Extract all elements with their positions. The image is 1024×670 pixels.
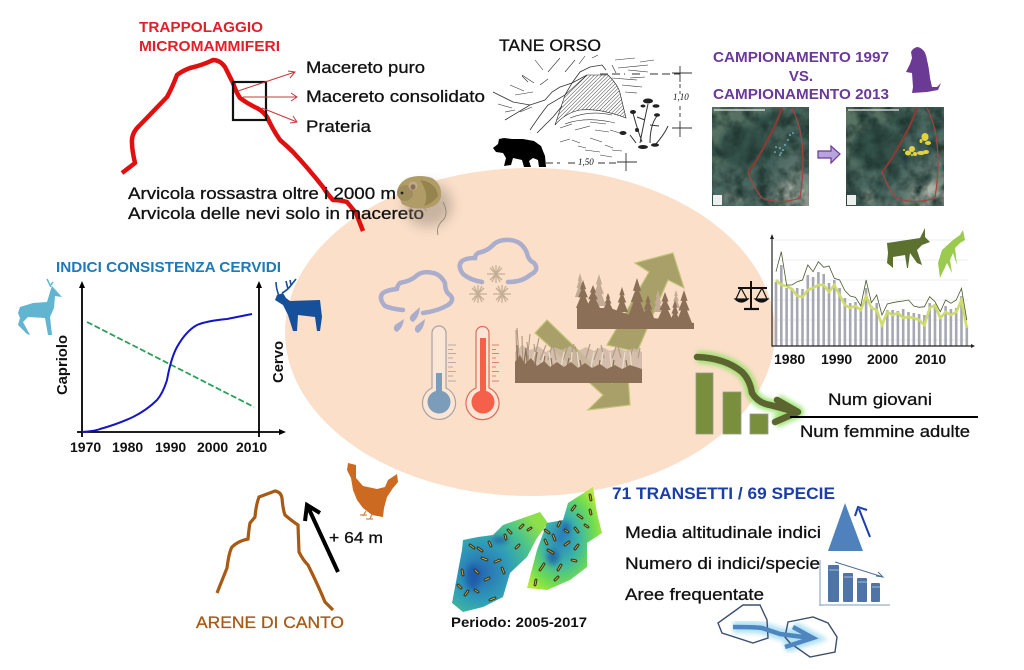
icon: area shift polygons (718, 605, 837, 657)
grouse legs (360, 511, 373, 519)
sampling square (233, 82, 266, 120)
panel: song arenas (196, 463, 398, 632)
axis years (70, 439, 267, 455)
icon: warm thermometer (466, 326, 499, 420)
heading: sampling comparison (713, 49, 889, 103)
heading: sampling comparison: VS. (789, 68, 813, 85)
transect squiggles (458, 495, 591, 600)
DEM dark valleys (466, 522, 570, 590)
mountain outline (217, 491, 333, 610)
icon: roe deer (18, 279, 62, 335)
axis years: 1970 (70, 439, 101, 455)
den dimensions: 1,50 (578, 157, 594, 167)
den dimensions (578, 92, 689, 167)
map 1997 (712, 107, 809, 206)
metric labels: Media altitudinale indici (625, 523, 821, 542)
fraction: Num giovani (828, 390, 932, 409)
panel: marmot sampling (712, 47, 944, 206)
axis years: 2000 (867, 351, 898, 367)
icon: bear (493, 138, 546, 167)
icon: red deer (275, 279, 322, 331)
icon: snow cloud (460, 240, 536, 303)
axis years: 2010 (236, 439, 267, 455)
panel: chamois chart (735, 228, 975, 367)
habitat labels (306, 58, 485, 136)
axis years: 1980 (774, 351, 805, 367)
icon: marmot (906, 47, 941, 93)
icon: rain cloud (381, 272, 452, 333)
map 2013 (846, 107, 944, 206)
chart axes (77, 281, 286, 437)
arrows to habitats (238, 71, 297, 123)
heading: trapping: TRAPPOLAGGIO (139, 19, 263, 36)
grid lines (773, 240, 968, 340)
chart axes (770, 234, 975, 348)
red mountain profile (122, 60, 363, 231)
bars (776, 265, 967, 346)
arrow: grassland down (535, 320, 630, 410)
light green series (776, 280, 967, 328)
icon: balance scale (735, 281, 768, 309)
icon: declining bars (820, 560, 890, 606)
heading: sampling comparison: CAMPIONAMENTO 1997 (713, 49, 889, 66)
den dimensions: 1,10 (673, 92, 689, 102)
panel: bear dens (493, 36, 692, 171)
icon: vole (397, 176, 452, 235)
red deer curve (82, 314, 252, 432)
arrow: forest up (607, 253, 684, 352)
den sketch (493, 55, 692, 171)
icon: grouse (347, 463, 398, 517)
icon: cold thermometer (422, 326, 456, 419)
habitat labels: Macereto consolidato (306, 87, 485, 106)
icon: forest (575, 273, 694, 329)
roe deer dashed trend (87, 322, 254, 407)
habitat labels: Prateria (306, 117, 372, 136)
vole species text (128, 184, 424, 223)
dark trend line (776, 252, 967, 320)
panel: deer indices chart (18, 259, 322, 455)
period label: Periodo: 2005-2017 (451, 614, 587, 630)
altitude label: + 64 m (329, 530, 383, 547)
habitat labels: Macereto puro (306, 58, 425, 77)
DEM right lobe (527, 487, 602, 590)
panel: transects map (451, 487, 602, 630)
panel: climate and vegetation icons (381, 240, 694, 420)
panel: butterfly transects (612, 484, 890, 657)
axis labels: Capriolo (54, 335, 71, 395)
axis years: 1980 (112, 439, 143, 455)
axis years: 1990 (155, 439, 186, 455)
axis years: 2000 (197, 439, 228, 455)
axis labels (54, 335, 287, 395)
DEM left lobe (452, 512, 548, 612)
heading: transects: 71 TRANSETTI / 69 SPECIE (612, 484, 835, 503)
axis years: 2010 (915, 351, 946, 367)
heading: trapping: MICROMAMMIFERI (139, 38, 280, 55)
downward arrow glow (697, 357, 798, 422)
icon: triangle and arrow (828, 503, 870, 551)
heading: sampling comparison: CAMPIONAMENTO 2013 (713, 86, 889, 103)
fraction: Num femmine adulte (800, 422, 970, 441)
panel: young to female ratio (696, 357, 978, 441)
icon: dark chamois (887, 228, 930, 268)
heading: song arenas: ARENE DI CANTO (196, 613, 344, 632)
downward arrow (697, 357, 798, 422)
axis years: 1990 (821, 351, 852, 367)
den plants (620, 98, 660, 149)
icon: light chamois (938, 230, 965, 278)
metric labels (625, 523, 821, 604)
vole species text: Arvicola rossastra oltre i 2000 m (128, 184, 396, 203)
vole species text: Arvicola delle nevi solo in macereto (128, 204, 424, 223)
fraction (790, 390, 978, 441)
altitude arrow (305, 505, 338, 572)
heading: bear dens: TANE ORSO (499, 36, 601, 55)
metric labels: Aree frequentate (625, 585, 764, 604)
heading: trapping (139, 19, 280, 55)
arrow between maps (818, 146, 840, 163)
panel: small mammal trapping (122, 19, 485, 235)
axis years (774, 351, 946, 367)
axis labels: Cervo (270, 341, 287, 383)
green bars (696, 373, 768, 434)
metric labels: Numero di indici/specie (625, 554, 820, 573)
heading: deer indices: INDICI CONSISTENZA CERVIDI (56, 259, 281, 276)
icon: grassland (515, 328, 642, 383)
central climate ellipse (285, 168, 775, 496)
